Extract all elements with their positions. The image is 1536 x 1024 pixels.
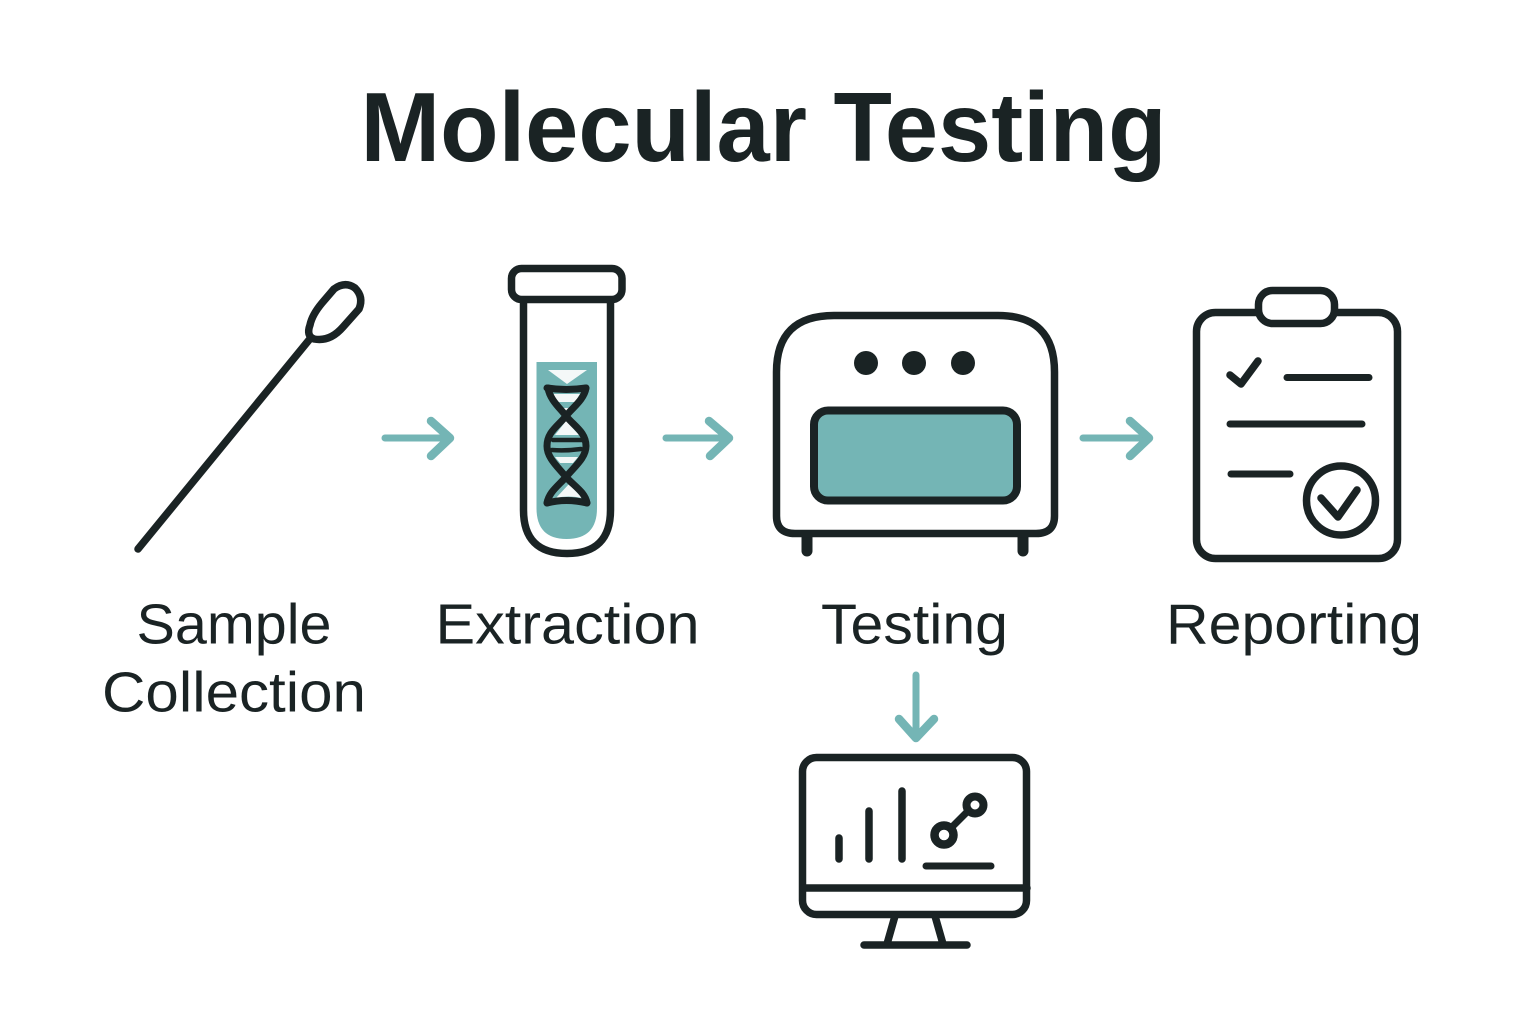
label: Sample Collection: Collection — [102, 660, 366, 724]
DNA helix — [547, 388, 587, 503]
white helix highlights — [548, 370, 587, 498]
arrow: tube to analyzer — [666, 421, 729, 456]
label: Extraction: Extraction — [436, 592, 700, 656]
tube outline — [512, 268, 622, 554]
label: Reporting: Reporting — [1166, 592, 1422, 656]
icon: analyzer machine — [776, 316, 1054, 551]
label: Sample Collection: Sample — [136, 592, 332, 656]
liquid — [536, 362, 597, 539]
legs — [807, 537, 1023, 551]
label: Sample Collection — [102, 592, 366, 724]
icon: clipboard report — [1196, 290, 1398, 558]
title: Molecular Testing — [360, 72, 1166, 182]
icon: computer monitor with results — [802, 758, 1027, 945]
arrow: swab to tube — [385, 421, 450, 456]
arrow: analyzer to report — [1083, 421, 1149, 456]
indicator lights — [854, 351, 878, 375]
label: Testing: Testing — [821, 592, 1008, 656]
arrow: testing down to monitor — [899, 675, 934, 738]
window — [814, 410, 1017, 500]
icon: test tube with DNA — [512, 268, 622, 554]
icon: swab — [138, 285, 361, 549]
body — [776, 316, 1054, 534]
